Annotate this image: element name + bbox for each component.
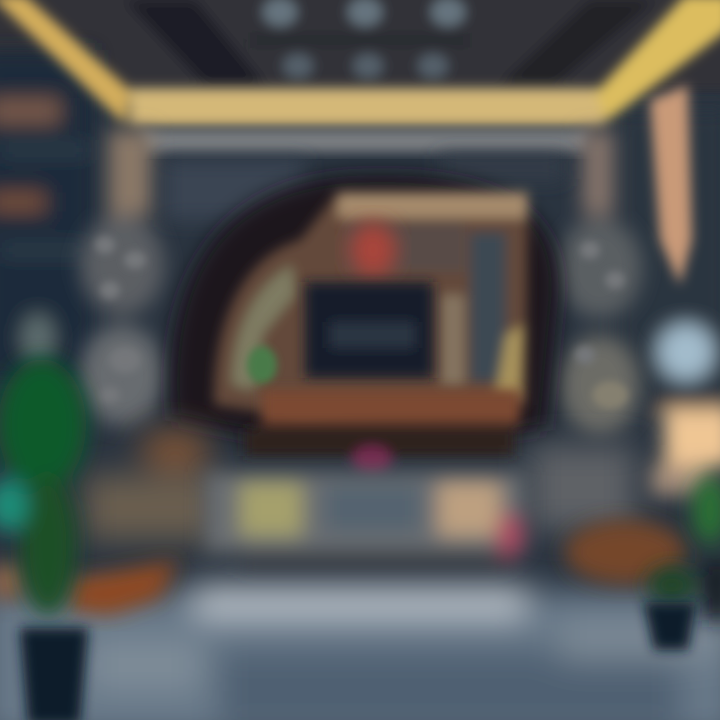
pillar mottling bbox=[95, 236, 628, 409]
left basket bbox=[0, 560, 178, 615]
pillars bbox=[80, 130, 642, 435]
right pot bbox=[644, 602, 696, 650]
green accent bbox=[247, 346, 277, 384]
right plant bbox=[648, 476, 720, 620]
wooden frame bbox=[214, 192, 528, 418]
right basket bbox=[565, 520, 685, 584]
central screen bbox=[305, 282, 433, 378]
left plant bbox=[0, 359, 86, 615]
floor bbox=[0, 584, 720, 720]
right wall bbox=[615, 110, 720, 495]
yellow beams bbox=[0, 0, 720, 126]
dark arch bbox=[170, 175, 559, 440]
band under beam bbox=[140, 130, 590, 152]
left pot bbox=[20, 628, 88, 720]
wooden console bbox=[245, 390, 520, 474]
lower side area bbox=[85, 430, 635, 540]
upper wall panel bbox=[165, 155, 565, 220]
ceiling bbox=[0, 0, 720, 92]
left shelves bbox=[0, 50, 95, 380]
sofa bbox=[205, 472, 525, 571]
red accent bbox=[349, 222, 397, 278]
hanging peach panel bbox=[650, 85, 692, 285]
